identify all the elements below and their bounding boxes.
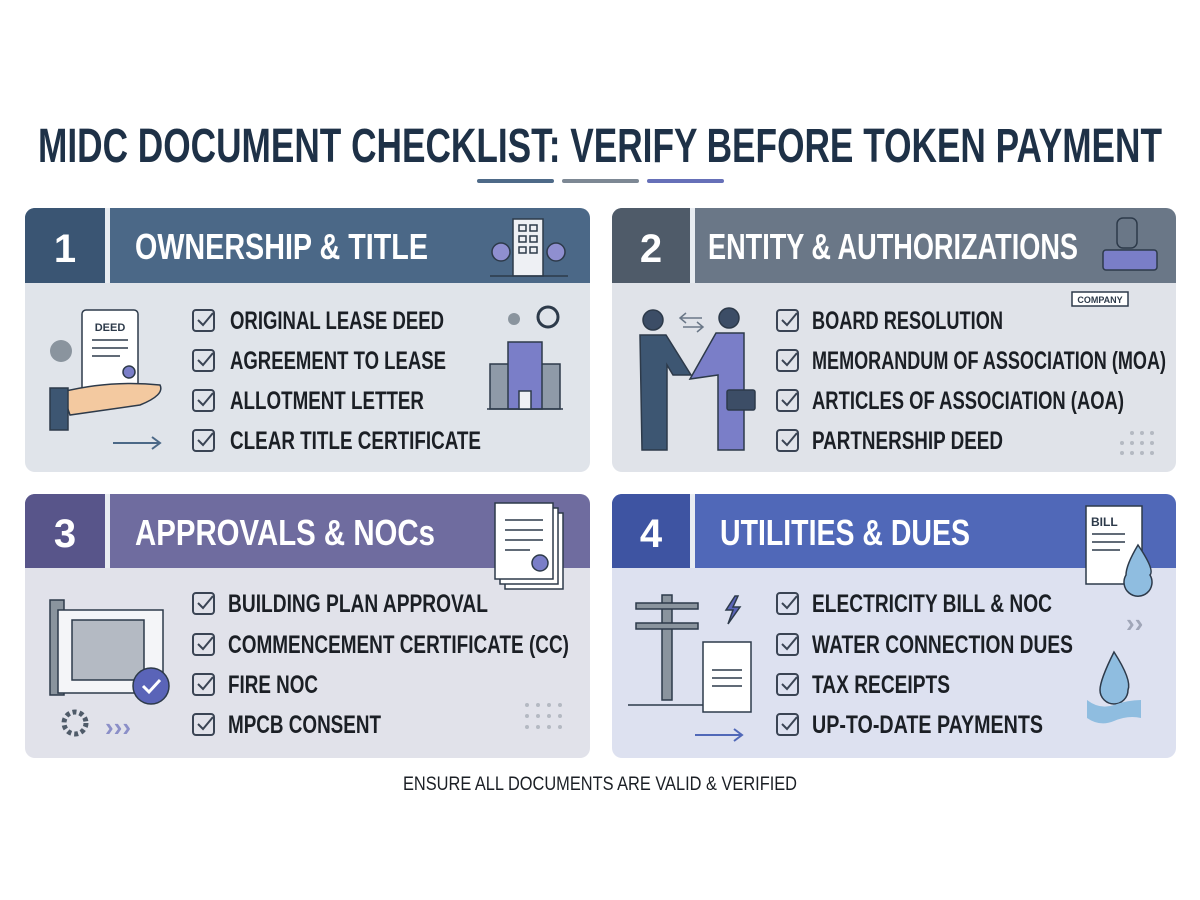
checklist: ELECTRICITY BILL & NOC	[812, 590, 1052, 618]
number 1: 1	[54, 227, 76, 271]
arrow	[695, 729, 742, 741]
icon: deed in hand: DEED	[95, 322, 125, 334]
icon: power pole and bill	[628, 595, 751, 712]
icon: dot grid	[1120, 431, 1154, 455]
arrow	[113, 437, 160, 449]
heading: OWNERSHIP & TITLE	[135, 226, 428, 267]
checklist: WATER CONNECTION DUES	[812, 631, 1073, 659]
checklist	[193, 307, 481, 455]
checklist: AGREEMENT TO LEASE	[230, 347, 446, 375]
checklist: ORIGINAL LEASE DEED	[230, 307, 444, 335]
icon: deed in hand	[50, 310, 161, 430]
checklist: BUILDING PLAN APPROVAL	[228, 590, 488, 618]
heading: ENTITY & AUTHORIZATIONS	[708, 226, 1078, 267]
checklist: BOARD RESOLUTION	[812, 307, 1003, 335]
icon: water drop with waves	[1087, 652, 1141, 723]
icon: company stamp	[1072, 218, 1157, 306]
heading: APPROVALS & NOCs	[135, 512, 435, 553]
icon: handshake	[640, 308, 755, 450]
checklist: ALLOTMENT LETTER	[230, 387, 424, 415]
icon: gear and chevrons	[64, 712, 131, 742]
number 3: 3	[54, 512, 76, 556]
icon: chevrons: ››	[1126, 608, 1143, 638]
number 4: 4	[640, 512, 663, 556]
checklist: MPCB CONSENT	[228, 711, 381, 739]
icon: gear and chevrons: ›››	[105, 712, 131, 742]
icon: bill with drop	[1086, 506, 1152, 596]
checklist	[193, 590, 569, 739]
checklist	[777, 307, 1166, 455]
panel: ownership & title	[25, 208, 590, 472]
icon: bill with drop: BILL	[1091, 515, 1118, 529]
icon: documents with check	[495, 503, 563, 589]
checklist	[777, 590, 1073, 739]
panel: approvals & NOCs	[25, 494, 590, 758]
checklist: PARTNERSHIP DEED	[812, 427, 1003, 455]
icon: company stamp: COMPANY	[1077, 295, 1123, 305]
checklist: COMMENCEMENT CERTIFICATE (CC)	[228, 631, 569, 659]
icon: building with trees	[490, 219, 568, 276]
checklist: CLEAR TITLE CERTIFICATE	[230, 427, 481, 455]
number 2: 2	[640, 227, 662, 271]
checklist: FIRE NOC	[228, 671, 318, 699]
icon: office building with gears	[487, 307, 563, 409]
heading: UTILITIES & DUES	[720, 512, 970, 553]
panel: utilities & dues	[612, 494, 1176, 758]
icon: dot grid	[525, 703, 562, 729]
checklist: TAX RECEIPTS	[812, 671, 950, 699]
checklist: UP-TO-DATE PAYMENTS	[812, 711, 1043, 739]
footer note: ENSURE ALL DOCUMENTS ARE VALID & VERIFIED	[403, 774, 797, 795]
icon: blueprint with check	[50, 600, 169, 704]
panel: entity & authorizations	[612, 208, 1176, 472]
